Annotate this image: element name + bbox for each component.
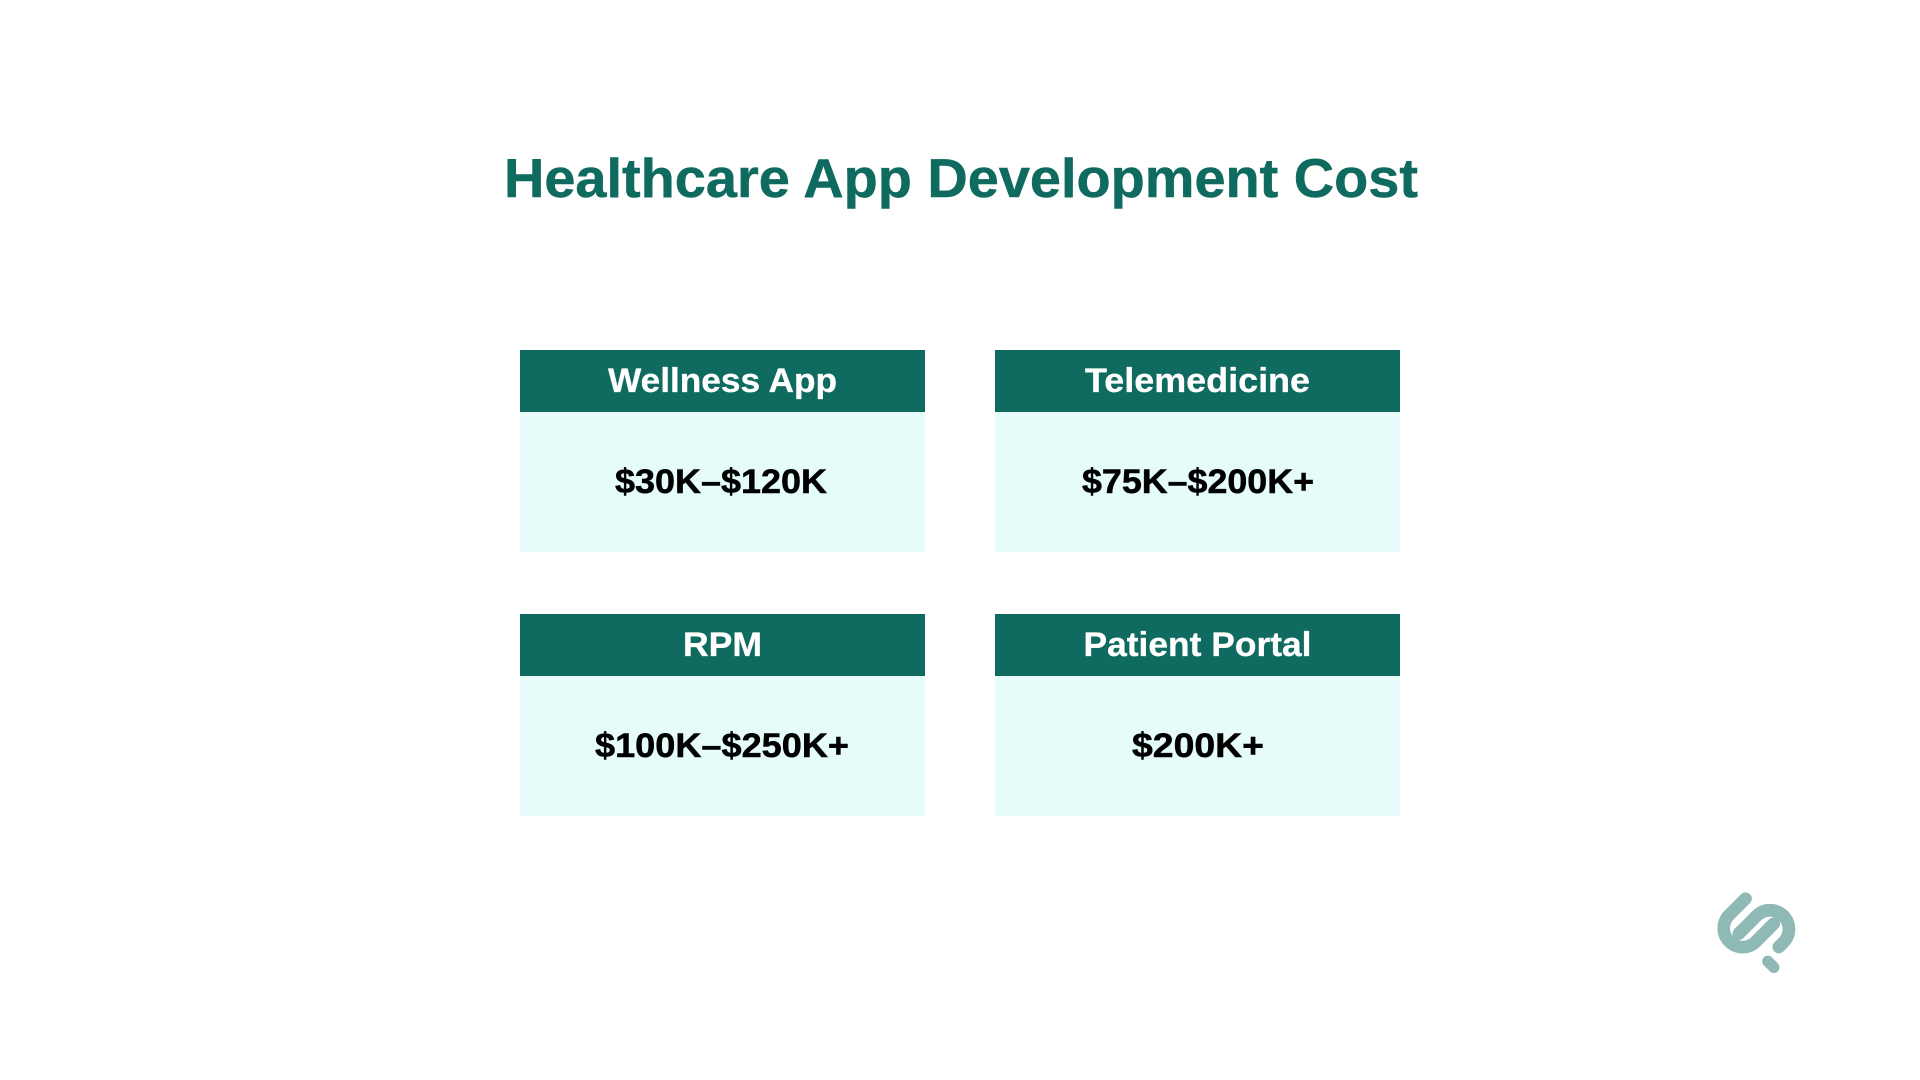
panel header: Patient Portal <box>995 614 1400 676</box>
panel body: Patient Portal <box>995 614 1400 816</box>
panel header: Patient Portal: Patient Portal <box>1084 626 1312 664</box>
panel body: Wellness App <box>520 350 925 552</box>
panel header: Wellness App <box>520 350 925 412</box>
panel: Telemedicine <box>995 350 1400 552</box>
panel header: Telemedicine <box>995 350 1400 412</box>
price: Wellness App: $30K–$120K <box>615 463 827 501</box>
panel body: RPM <box>520 614 925 816</box>
panel header: RPM <box>520 614 925 676</box>
price: Telemedicine: $75K–$200K+ <box>1082 463 1314 501</box>
price: Patient Portal: $200K+ <box>1132 727 1264 765</box>
panel header: Wellness App: Wellness App <box>608 362 837 400</box>
panel: RPM <box>520 614 925 816</box>
panel body: Telemedicine <box>995 350 1400 552</box>
title: Healthcare App Development Cost <box>504 147 1418 209</box>
panel: Patient Portal <box>995 614 1400 816</box>
panel header: RPM: RPM <box>683 626 762 664</box>
panel header: Telemedicine: Telemedicine <box>1085 362 1310 400</box>
icon: brand logo <box>1724 899 1789 967</box>
price: RPM: $100K–$250K+ <box>595 727 849 765</box>
panel: Wellness App <box>520 350 925 552</box>
